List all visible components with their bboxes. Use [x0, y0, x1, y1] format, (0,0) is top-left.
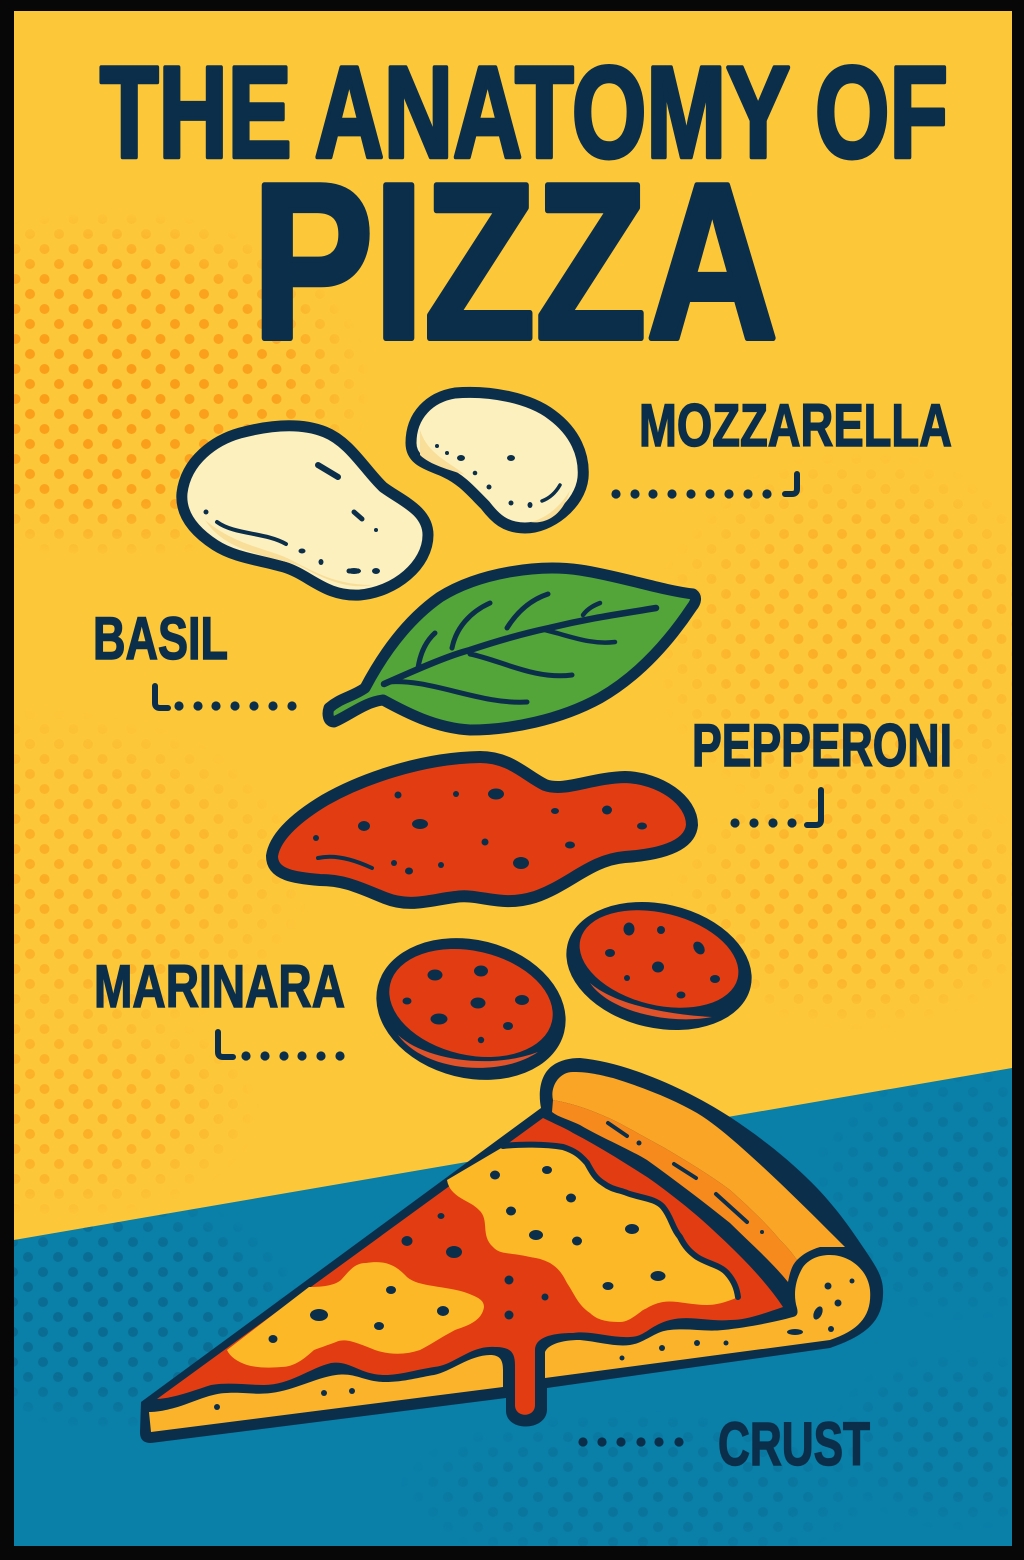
cheese [447, 1146, 738, 1322]
label: marinara [94, 953, 345, 1061]
label: pepperoni [692, 712, 952, 828]
icon: marinara sauce splash [272, 757, 692, 903]
icon: pepperoni slice left [361, 919, 581, 1099]
icon: pizza slice [140, 1058, 883, 1443]
panel: blue diagonal ground [14, 1068, 1012, 1546]
icon: small mozzarella [411, 392, 583, 528]
toppings specks [214, 1140, 854, 1410]
icon: large mozzarella [182, 426, 428, 595]
bottom crust [149, 1355, 503, 1432]
leader: basil [155, 686, 297, 711]
label: basil [93, 605, 297, 711]
leader: crust [578, 1437, 684, 1447]
label: basil: BASIL [93, 605, 228, 672]
label: crust: CRUST [718, 1410, 870, 1478]
leaf veins [384, 594, 656, 702]
label: marinara: MARINARA [94, 953, 345, 1020]
title [100, 39, 948, 386]
icon: basil leaf [328, 568, 696, 730]
label: crust [578, 1410, 870, 1478]
title: PIZZA [252, 138, 778, 386]
leader: marinara [218, 1032, 345, 1061]
icon: pepperoni slice right [553, 884, 765, 1048]
sauce layer [157, 1118, 783, 1415]
leader: mozzarella [611, 474, 797, 499]
crust rim [552, 1072, 845, 1260]
label: mozzarella [611, 392, 952, 499]
leader: pepperoni [730, 790, 821, 828]
